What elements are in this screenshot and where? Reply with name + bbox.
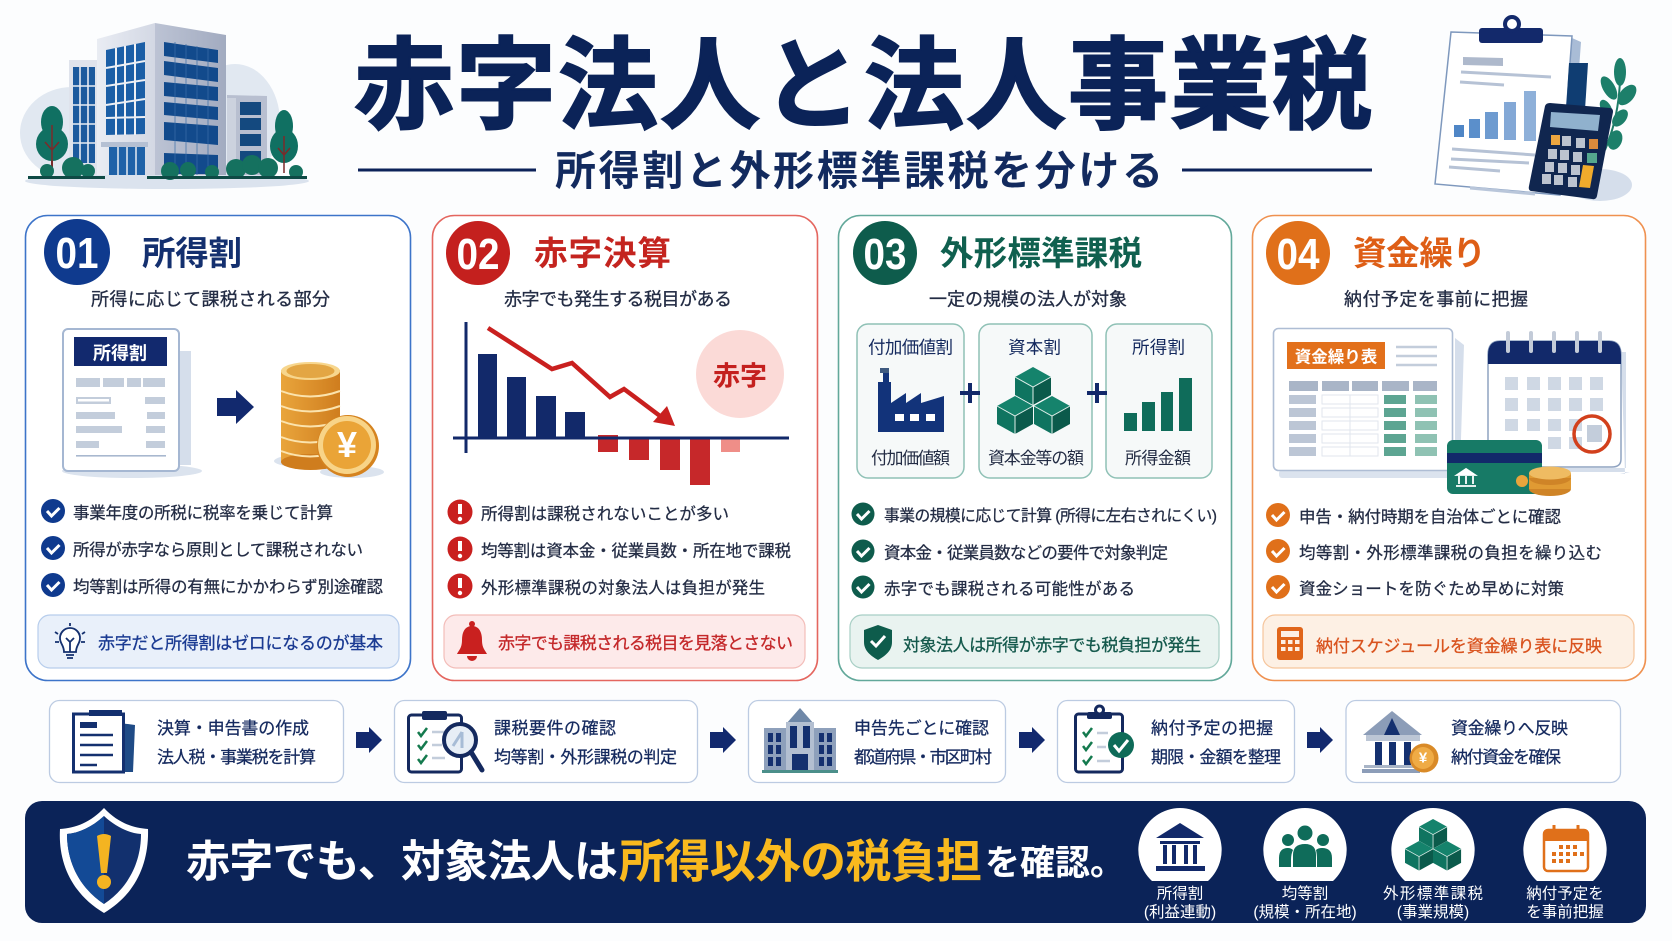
box: 付加価値割: [857, 324, 964, 478]
checklist: 赤字でも課税される可能性がある: [884, 580, 1135, 598]
box: 付加価値割: 付加価値割: [868, 338, 953, 358]
checklist: 事業の規模に応じて計算 (所得に左右されにくい): [884, 506, 1217, 525]
process step 1: [50, 700, 344, 782]
box: 所得割: [1106, 324, 1212, 478]
step text: [157, 719, 316, 767]
number badge 03: [853, 221, 917, 285]
step text: [1451, 719, 1568, 767]
heading: 所得割: 所得割: [142, 236, 242, 273]
badge: 赤字: [696, 330, 784, 418]
step text: 法人税・事業税を計算: [157, 748, 316, 767]
banner message: を確認。: [985, 844, 1125, 883]
callout: [444, 615, 805, 668]
warning list: 所得割は課税されないことが多い: [481, 504, 729, 524]
process step 3: [748, 700, 1006, 782]
step text: [494, 719, 677, 767]
icon item: 外形標準課税: 外形標準課税: [1383, 884, 1483, 902]
callout: [1263, 615, 1634, 668]
heading: 外形標準課税: 外形標準課税: [940, 236, 1142, 273]
icon item: 均等割: [1253, 808, 1357, 921]
banner message: 赤字でも、対象法人は: [186, 838, 618, 886]
number badge 04: [1266, 221, 1330, 285]
checklist: 所得が赤字なら原則として課税されない: [73, 540, 363, 560]
icon: clipboard with check: [1076, 706, 1134, 772]
box: 資本割: 資本割: [1008, 338, 1061, 358]
step text: 申告先ごとに確認: [854, 719, 989, 738]
badge: 赤字: 赤字: [713, 362, 767, 392]
description: 赤字でも発生する税目がある: [504, 290, 732, 310]
icon item: 均等割: 均等割: [1282, 884, 1328, 902]
icon item: 納付予定: [1523, 808, 1607, 921]
icon: clipboard with magnifier: [408, 711, 482, 772]
panel: 01 所得割: [26, 216, 410, 680]
description: 一定の規模の法人が対象: [929, 290, 1127, 310]
icon: document: [74, 710, 135, 772]
step text: 都道府県・市区町村: [854, 748, 992, 767]
number badge 02: 02: [456, 230, 500, 279]
checklist: 申告・納付時期を自治体ごとに確認: [1299, 508, 1562, 526]
icon item: 納付予定: を事前把握: [1526, 903, 1604, 921]
callout: 納付スケジュールを資金繰り表に反映: [1316, 637, 1602, 656]
title: 赤字法人と法人事業税: [354, 30, 1372, 142]
callout: 対象法人は所得が赤字でも税負担が発生: [903, 636, 1201, 655]
arrow: [1019, 727, 1045, 753]
cash flow table illustration: [1274, 328, 1464, 478]
number badge 03: 03: [864, 230, 906, 279]
description: 納付予定を事前に把握: [1344, 290, 1528, 310]
process step 2: [394, 700, 698, 782]
checklist: [1266, 503, 1602, 599]
document illustration: 所得割: [93, 344, 147, 364]
checklist: [852, 502, 1217, 598]
box: 資本割: 資本金等の額: [988, 449, 1084, 468]
icon item: 外形標準課税: (事業規模): [1397, 903, 1469, 921]
subtitle: 所得割と外形標準課税を分ける: [555, 148, 1163, 194]
subtitle: [358, 148, 1372, 194]
step text: 資金繰りへ反映: [1451, 719, 1568, 738]
process step 4: [1058, 700, 1294, 782]
checklist: 資本金・従業員数などの要件で対象判定: [884, 544, 1168, 562]
bank card and coins: [1447, 440, 1571, 496]
box: 付加価値割: 付加価値額: [871, 449, 950, 468]
box: 資本割: [979, 324, 1092, 478]
calendar illustration: [1488, 333, 1630, 474]
arrow: [356, 727, 382, 753]
icon item: 所得割: 所得割: [1157, 884, 1203, 902]
document illustration: [62, 329, 202, 478]
banner message: 所得以外の税負担: [619, 836, 982, 888]
plus signs: [960, 383, 1107, 403]
number badge 01: 01: [56, 229, 98, 278]
callout: [850, 615, 1219, 668]
yen coin stack: [274, 362, 384, 478]
banner: [25, 801, 1646, 923]
panel: 02 赤字決算: [432, 216, 818, 680]
number badge 01: [44, 219, 110, 285]
box: 所得割: 所得金額: [1125, 449, 1191, 468]
process step 5: [1346, 700, 1620, 782]
icon: warning shield: [60, 808, 148, 913]
step text: 課税要件の確認: [494, 719, 616, 738]
number badge 02: [446, 221, 510, 285]
heading: 資金繰り: 資金繰り: [1353, 236, 1486, 273]
bar chart: declining to deficit: [453, 322, 789, 485]
icon: bank with yen coin: ¥: [1419, 750, 1428, 766]
number badge 04: 04: [1276, 230, 1320, 279]
arrow: [710, 727, 736, 753]
warning list: [448, 500, 791, 598]
icon item: 納付予定: 納付予定を: [1526, 884, 1604, 902]
icon item: 所得割: (利益連動): [1144, 903, 1216, 921]
step text: 納付予定の把握: [1151, 719, 1273, 738]
icon item: 所得割: [1138, 808, 1222, 921]
warning list: 外形標準課税の対象法人は負担が発生: [481, 578, 765, 598]
box: 所得割: 所得割: [1132, 338, 1185, 358]
cash flow table illustration: 資金繰り表: [1295, 346, 1378, 366]
yen coin stack: ¥: [337, 424, 357, 465]
step text: 決算・申告書の作成: [157, 719, 309, 738]
arrow: [1307, 727, 1333, 753]
callout: [38, 615, 399, 668]
step text: 均等割・外形課税の判定: [494, 748, 677, 767]
step text: [854, 719, 992, 767]
callout: 赤字でも課税される税目を見落とさない: [498, 634, 793, 653]
checklist: 資金ショートを防ぐため早めに対策: [1299, 580, 1564, 598]
checklist: 均等割・外形標準課税の負担を繰り込む: [1299, 544, 1602, 562]
banner message: [186, 836, 1125, 888]
checklist: 均等割は所得の有無にかかわらず別途確認: [73, 578, 384, 596]
arrow: [217, 390, 254, 424]
illustration: office building: [20, 23, 309, 189]
heading: 赤字決算: 赤字決算: [534, 236, 671, 273]
step text: 納付資金を確保: [1451, 748, 1561, 767]
panel: 04 資金繰り: [1252, 216, 1646, 680]
checklist: 事業年度の所税に税率を乗じて計算: [73, 504, 333, 522]
description: 所得に応じて課税される部分: [91, 290, 330, 310]
callout: 赤字だと所得割はゼロになるのが基本: [98, 634, 383, 653]
icon: bank with yen coin: [1362, 711, 1438, 773]
icon item: 外形標準課税: [1383, 808, 1483, 921]
warning list: 均等割は資本金・従業員数・所在地で課税: [481, 542, 791, 560]
step text: [1151, 719, 1281, 767]
icon: government building: [762, 708, 838, 773]
panel: 03 外形標準課税: [838, 216, 1232, 680]
illustration: clipboard and calculator: [1435, 17, 1640, 201]
checklist: [41, 499, 384, 597]
icon item: 均等割: (規模・所在地): [1253, 903, 1357, 921]
step text: 期限・金額を整理: [1151, 748, 1281, 767]
